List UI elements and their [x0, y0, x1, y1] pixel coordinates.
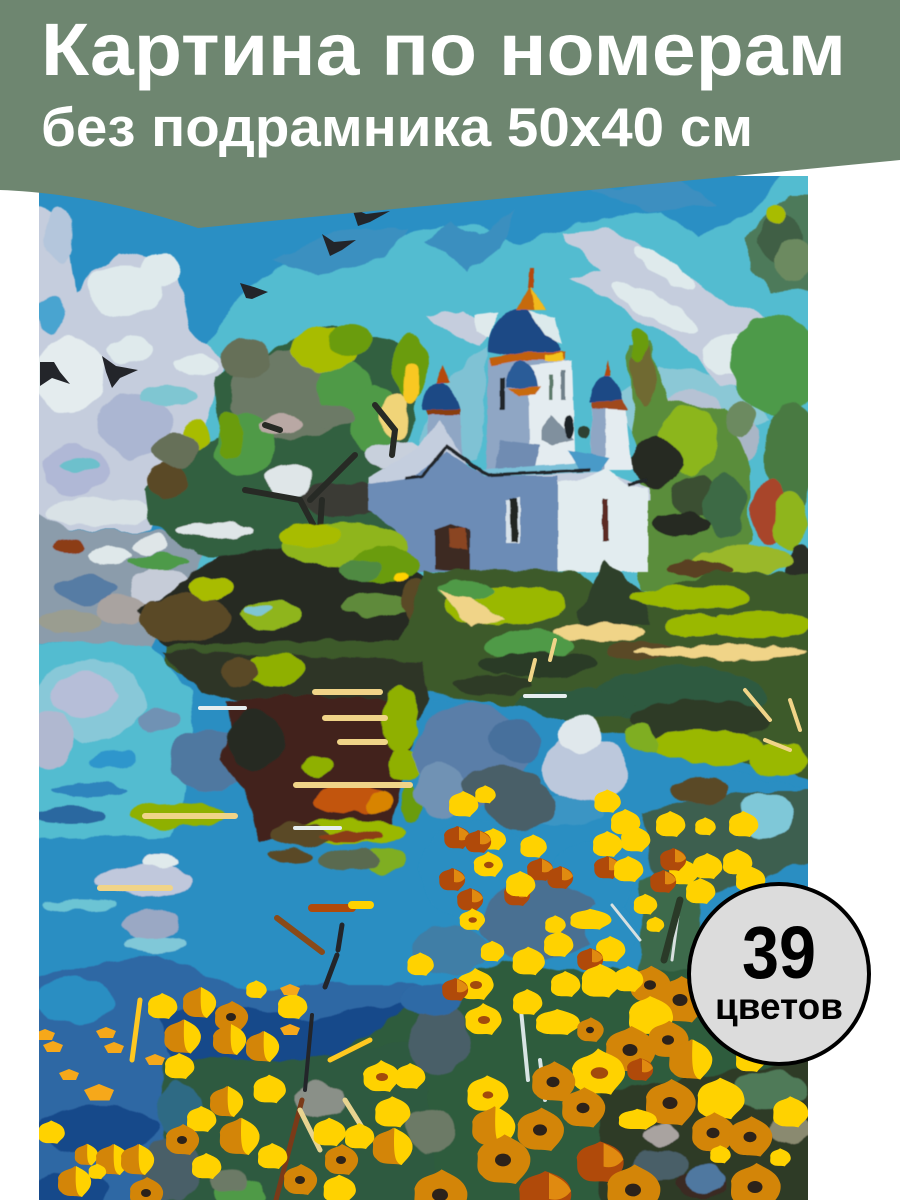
big tree: [132, 324, 428, 560]
badge: 39 colours: [689, 884, 869, 1064]
flowers lower right: [414, 964, 808, 1200]
birds: [40, 208, 390, 394]
church drums: [486, 360, 572, 480]
flowers lower left: [35, 980, 425, 1200]
flowers upper right: [407, 785, 765, 976]
church domes: [488, 308, 560, 358]
flower bed background: [140, 776, 815, 1200]
banner: [0, 0, 900, 228]
grass and bank: [164, 559, 808, 780]
title: Картина по номерам: [41, 8, 846, 91]
water highlights and reeds: [100, 692, 680, 1200]
tree branches: [245, 405, 395, 530]
reeds on bank: [530, 640, 800, 750]
church: [368, 268, 650, 572]
subtitle: без подрамника 50х40 см: [41, 96, 753, 158]
painting base: [39, 638, 808, 789]
painting: church by the lake: [20, 160, 830, 1200]
clouds left: [25, 205, 225, 530]
badge: 39 colours: цветов: [715, 986, 843, 1027]
left far shore: [39, 514, 202, 648]
tree reflection in water: [127, 650, 635, 974]
flowers: [35, 785, 808, 1200]
right trees: [628, 195, 820, 605]
water: [39, 640, 711, 1200]
clouds right: [425, 228, 775, 462]
church walls: [368, 452, 558, 572]
church roof lines: [405, 447, 648, 485]
sky: [196, 176, 808, 592]
island dark foliage: [136, 521, 424, 648]
badge: 39 colours: 39: [742, 911, 816, 994]
